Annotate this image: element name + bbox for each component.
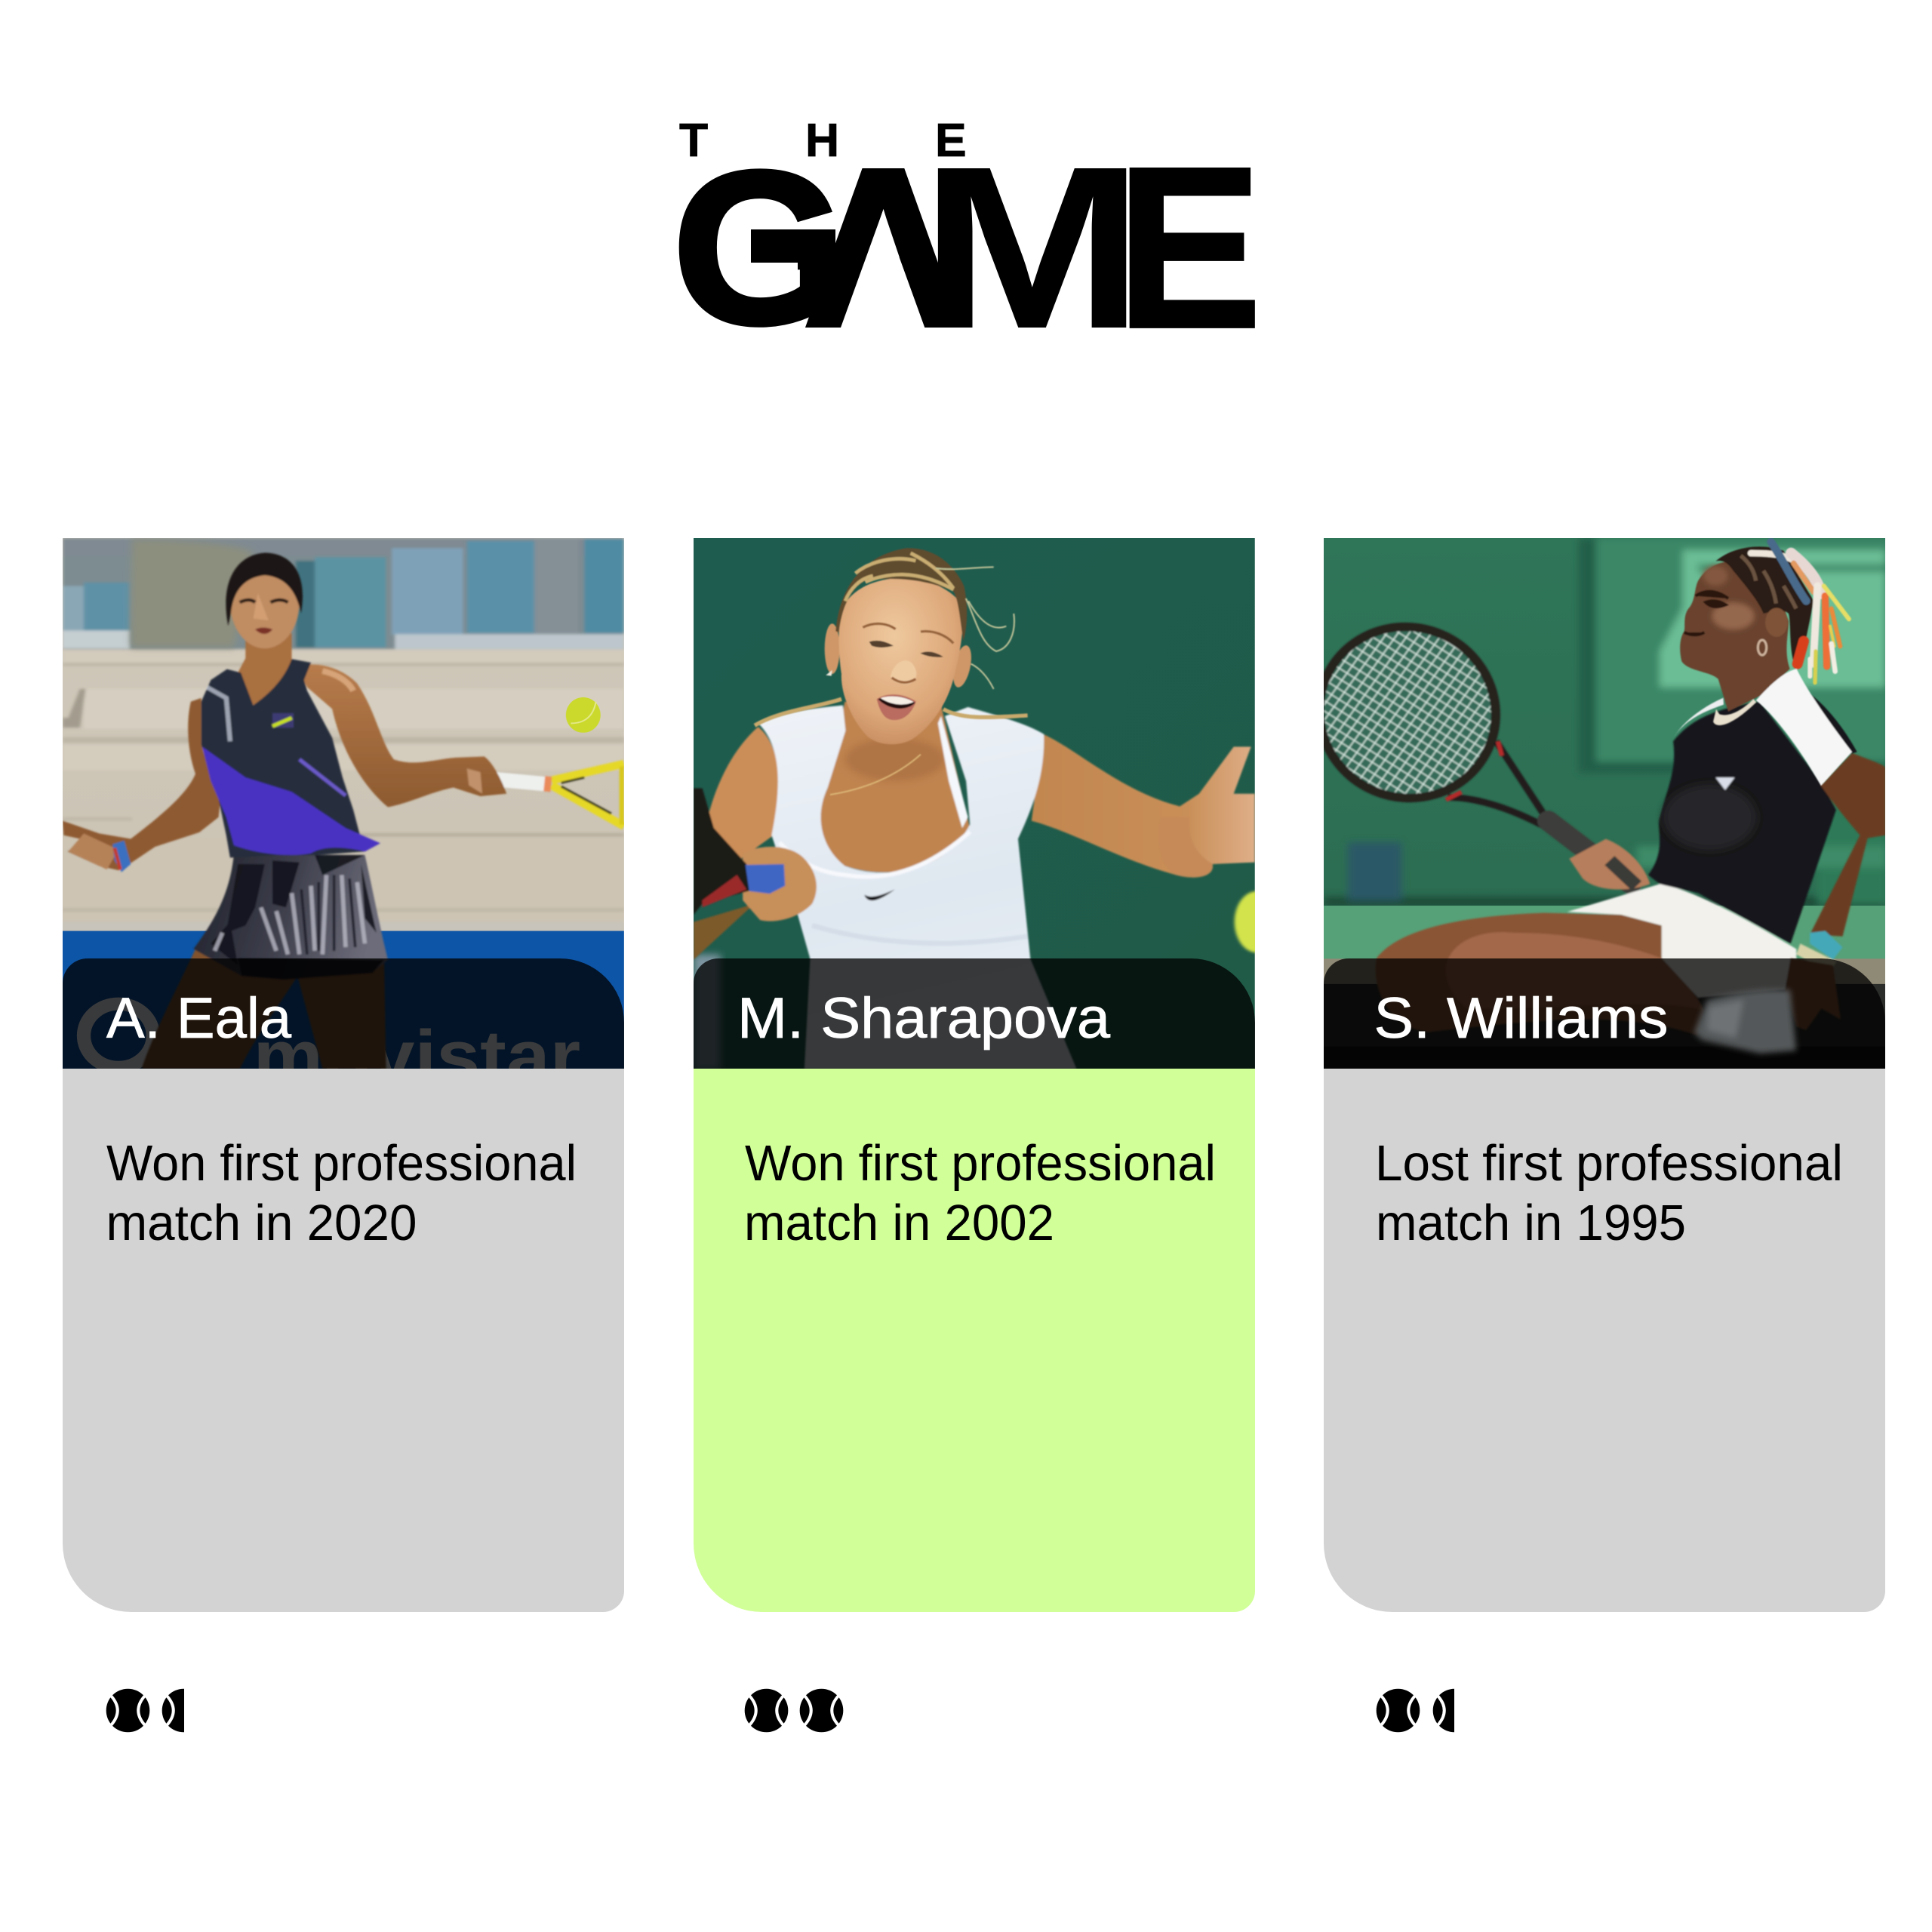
sleeve (1756, 669, 1852, 786)
name band (694, 958, 1255, 1069)
shoe sole and upper (1694, 989, 1796, 1054)
racket head (1296, 605, 1631, 884)
swoosh (865, 889, 895, 900)
chest (820, 702, 970, 872)
description: Won first professional (745, 1135, 1216, 1192)
head (229, 574, 301, 649)
rating: tennis balls (1377, 1689, 1476, 1732)
legs (142, 949, 386, 1069)
skirt (1567, 884, 1796, 998)
top: purple panel (202, 746, 380, 855)
card body: green (694, 1069, 1255, 1612)
right arm and hand (1032, 734, 1255, 878)
nose (891, 660, 916, 685)
racket (694, 789, 754, 915)
name band (1324, 958, 1885, 1069)
panel: M. Sharapova card (694, 538, 1279, 1732)
tennis ball (1235, 891, 1279, 952)
title: The Game logo (672, 114, 1262, 377)
neck and chest (238, 633, 292, 705)
hand on racket (1569, 839, 1650, 890)
beads (1751, 542, 1849, 683)
logo letter G: G (672, 127, 846, 369)
neck and face (1680, 561, 1790, 712)
lower left arm (694, 904, 754, 960)
ear and earring (1765, 608, 1788, 637)
card body: grey (63, 1069, 624, 1612)
shirt shoulder pieces (1804, 689, 1857, 755)
racket (552, 764, 624, 826)
head of M. Sharapova (755, 548, 1028, 795)
shirt: black (1648, 702, 1836, 943)
description: match in 1995 (1376, 1195, 1686, 1251)
photo: M. Sharapova hitting a forehand (694, 538, 1279, 1070)
movistar sign (84, 1004, 153, 1067)
logo letter A: A (805, 125, 961, 371)
title line: THE: THE (679, 114, 967, 167)
logo letter G crossbar (751, 229, 835, 263)
photo: S. Williams seated on court (1296, 538, 1889, 1070)
tennis ball (566, 697, 601, 733)
panel: A. Eala card (63, 538, 624, 1732)
mouth (877, 694, 916, 720)
collar (1713, 699, 1756, 725)
name band (63, 958, 624, 1069)
thighs (1376, 913, 1704, 1035)
hand on court (1785, 958, 1841, 1030)
hair (1715, 546, 1814, 666)
description: match in 2002 (744, 1195, 1054, 1251)
rating: tennis balls (106, 1689, 184, 1733)
logo letter E: E (1116, 119, 1262, 375)
card body: grey (1324, 1069, 1885, 1612)
shoe (1694, 989, 1796, 1054)
logo letter M: M (920, 118, 1144, 377)
right arm (1810, 753, 1886, 937)
shoe highlight (1707, 1000, 1743, 1038)
name: M. Sharapova: M. Sharapova (737, 986, 1111, 1051)
description: Won first professional (106, 1135, 577, 1192)
rating: tennis balls (745, 1689, 843, 1732)
hair (835, 548, 967, 641)
face (839, 578, 963, 744)
left arm (63, 698, 220, 870)
ponytail strands (755, 699, 1028, 725)
photo: A. Eala hitting a forehand (63, 538, 624, 1096)
photo: A. Eala hitting a forehand: movistar (254, 1015, 580, 1096)
top: navy (202, 659, 380, 857)
description: match in 2020 (106, 1195, 417, 1251)
name: A. Eala: A. Eala (106, 986, 292, 1051)
head of S. Williams (1674, 542, 1857, 786)
name: S. Williams: S. Williams (1374, 986, 1668, 1051)
fist (743, 847, 817, 921)
left upper arm (699, 727, 779, 889)
right arm (297, 665, 506, 807)
skirt (193, 854, 388, 980)
necklace (830, 755, 921, 795)
shirt (758, 705, 1077, 1069)
logo letter G counter (743, 263, 798, 273)
description: Lost first professional (1375, 1135, 1843, 1192)
ears (825, 623, 840, 674)
logo letter A counter (840, 211, 925, 329)
panel: S. Williams card (1296, 538, 1889, 1732)
brows and eyes (863, 623, 953, 643)
